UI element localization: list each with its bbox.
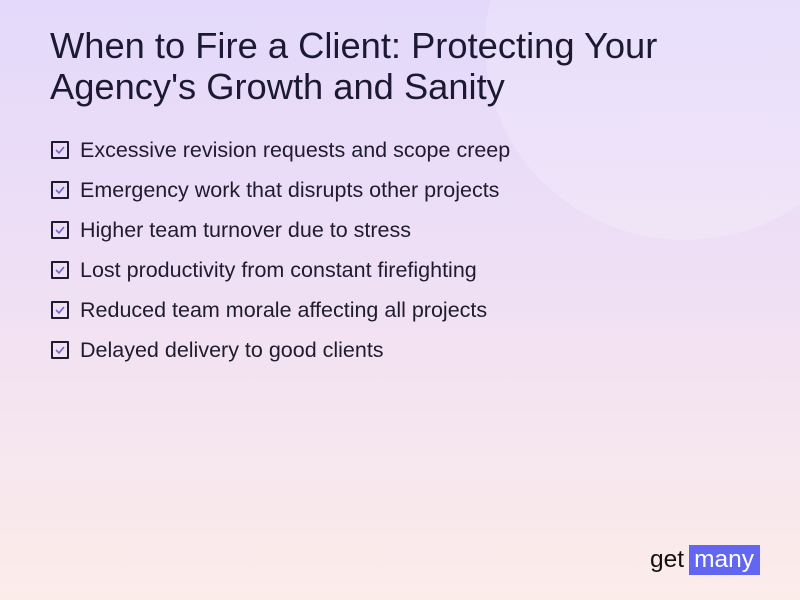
item 4: Lost productivity from constant firefighting — [80, 258, 477, 282]
logo — [650, 545, 760, 575]
item 5: Reduced team morale affecting all projects — [80, 298, 487, 322]
title: Agency's Growth and Sanity — [50, 66, 505, 107]
logo: get — [650, 546, 684, 573]
title: When to Fire a Client: Protecting Your — [50, 25, 657, 66]
item 6: Delayed delivery to good clients — [80, 338, 384, 362]
checklist — [51, 138, 510, 362]
title — [50, 25, 657, 107]
logo: many — [694, 546, 754, 573]
item 1: Excessive revision requests and scope creep — [80, 138, 510, 162]
item 2: Emergency work that disrupts other projects — [80, 178, 499, 202]
item 3: Higher team turnover due to stress — [80, 218, 411, 242]
